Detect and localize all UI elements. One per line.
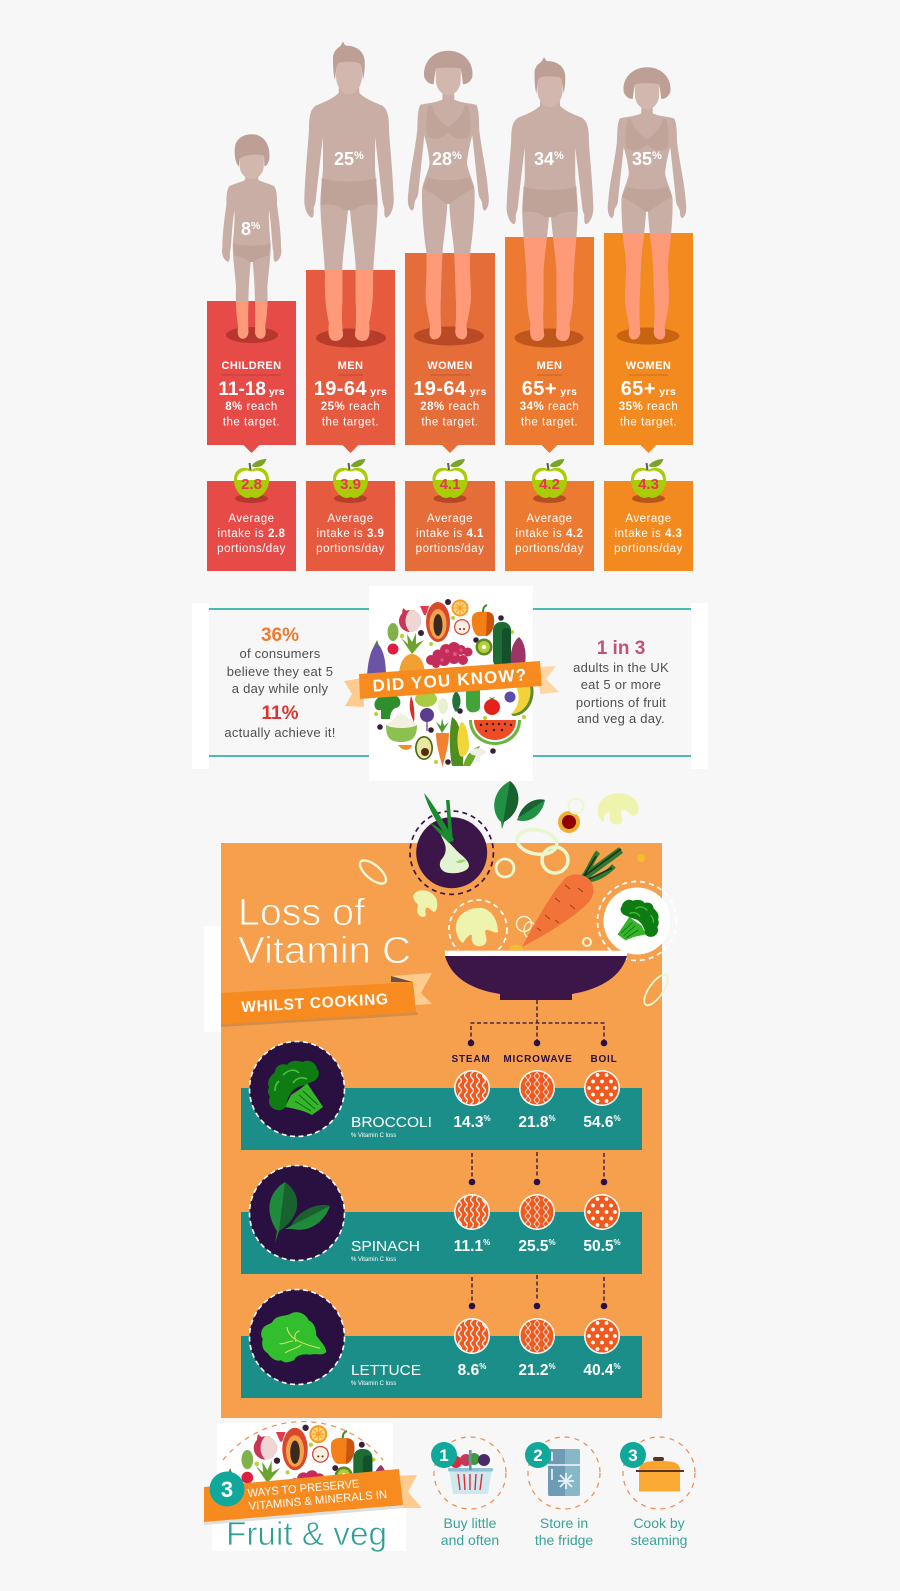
percent labels on figures: % [452,150,462,162]
panel: 3 ways to preserve [204,1421,696,1552]
tip 1: buy little and often: 1 [439,1446,449,1465]
panel: did you know [192,586,708,781]
illustration: onion rings [356,798,672,1009]
text: children block [218,360,285,428]
text: women 65+ block: the target. [620,416,677,428]
text: intake 4.2: Average [526,513,573,525]
intake block: men 19-64 [306,459,395,571]
block: men 65+ target [505,237,594,453]
text: store in the fridge: the fridge [535,1532,593,1548]
text: cook by steaming: steaming [631,1532,687,1548]
illustration: sauce drop [558,811,580,833]
panel: men 19-64 [304,42,395,453]
illustration: bowl [445,951,627,1000]
dot: yellow seeds [509,854,645,950]
values: broccoli: % [549,1114,556,1123]
row: lettuce [241,1290,642,1398]
text: buy little and often: Buy little [444,1515,497,1531]
text: cook by steaming: Cook by [633,1515,685,1531]
text: intake 3.9: portions/day [316,543,385,555]
badge: 2 [525,1442,551,1468]
dots: connector ends [468,1040,607,1046]
text: children block: the target. [223,416,280,428]
values: lettuce [458,1362,621,1379]
percent labels on figures: 28 [432,149,452,169]
tip 3: cook by steaming [620,1437,695,1548]
text: intake 4.1: portions/day [416,543,484,555]
text: intake 4.3: portions/day [614,543,683,555]
values: broccoli: % [614,1114,621,1123]
intake block: children [207,459,296,571]
ribbon: did you know: DID YOU KNOW? [372,665,528,696]
row: broccoli [241,1042,642,1150]
salmon legs: man [324,270,374,341]
salmon legs: child [236,301,268,339]
ribbon: whilst cooking [221,973,432,1027]
underlines beneath group names [222,374,668,376]
percent labels on figures: 35 [632,149,652,169]
shadow: women 65+ [616,328,680,344]
labels: cooking methods [452,1054,618,1065]
stat: 36 percent of consumers: actually achieve it! [224,725,336,740]
text: women 19-64 block [413,360,487,428]
illustration: broccoli circle [598,882,676,960]
shadow: children [226,327,278,343]
text: intake 4.2: portions/day [515,543,584,555]
row: broccoli: % Vitamin C loss [351,1133,396,1139]
text: men 19-64 block: the target. [322,416,379,428]
text: men 19-64 block: MEN [338,360,363,372]
panel: women 19-64 [405,51,495,453]
row: spinach: % Vitamin C loss [351,1257,396,1263]
row: lettuce: % Vitamin C loss [351,1381,396,1387]
text: women 65+ block: 35% reach [619,401,678,413]
intake block: women 65+ [604,459,693,571]
dashed arc [223,1422,383,1460]
block: men 19-64 target [306,270,395,453]
connectors: bowl to methods [471,1000,604,1043]
stat: 1 in 3 adults: eat 5 or more [581,677,661,692]
values: lettuce: 8.6 [458,1362,479,1379]
salmon legs: older woman [622,233,672,340]
icon: broccoli [250,1042,344,1136]
panel: women 65+ [604,67,693,453]
value: 4.3: 4.3 [638,476,659,493]
connectors: row 2 to row 3 [472,1275,604,1301]
block: children target [207,301,296,453]
values: broccoli: 54.6 [583,1114,614,1131]
text: ways to preserve: VITAMINS & MINERALS IN [248,1489,388,1513]
values: broccoli [453,1114,621,1131]
text: intake 3.9: Average [327,513,374,525]
percent labels on figures: % [554,150,564,162]
text: men 65+ block: 34% reach [520,401,579,413]
icon: apple 4.1 [432,459,468,503]
stat: 1 in 3 adults: portions of fruit [576,695,666,710]
percent labels on figures [241,149,662,239]
value: 2.8: 2.8 [241,476,262,493]
value: 3.9: 3.9 [340,476,361,493]
percent labels on figures: % [251,220,261,232]
text: women 65+ block: 65+ yrs [621,378,676,400]
text: buy little and often: and often [441,1532,499,1548]
values: spinach: % [549,1238,556,1247]
stat: 1 in 3 adults: adults in the UK [573,660,669,675]
heading: fruit and veg: Fruit & veg [226,1515,387,1552]
badge: 3 [210,1472,244,1506]
row: spinach [241,1166,642,1274]
tip 1: buy little and often [431,1437,506,1548]
value: 4.2: 4.2 [539,476,560,493]
ribbon: did you know [344,661,559,707]
dots: row 2 [469,1179,607,1185]
dots: row 3 [469,1303,607,1309]
ribbon: ways to preserve [204,1469,422,1525]
stat: 36 percent of consumers: believe they eat 5 [227,664,333,679]
percent labels on figures: 34 [534,149,554,169]
tip 2: store in the fridge: 2 [533,1446,543,1465]
percent labels on figures: % [354,150,364,162]
text: intake 4.1: intake is 4.1 [416,528,484,540]
icon: apple 2.8 [234,459,269,503]
text: women 65+ block: WOMEN [626,360,671,372]
text: ways to preserve: WAYS TO PRESERVE [247,1478,360,1500]
salmon legs: older man [524,237,576,341]
figure: woman [408,51,489,339]
text: ways to preserve [247,1478,388,1513]
intake block: men 65+ [505,459,594,571]
text: intake 2.8: Average [228,513,275,525]
methods: broccoli [454,1068,490,1108]
values: lettuce: 40.4 [583,1362,614,1379]
values: spinach [454,1238,621,1255]
text: children block: 11-18 yrs [218,379,285,400]
stat: 36 percent of consumers: 11% [262,703,299,724]
percent labels on figures: 25 [334,149,354,169]
icon: apple 4.2 [532,459,567,503]
figure: older woman [608,67,686,339]
block: women 19-64 target [405,253,495,453]
figure: older man [507,57,593,341]
values: spinach: 25.5 [518,1238,549,1255]
icon: pot [636,1457,684,1492]
values: broccoli: 14.3 [453,1114,484,1131]
illustration: small mushroom [413,890,437,917]
connectors: row 1 to row 2 [472,1152,604,1178]
icon: apple 4.3 [631,459,666,503]
figure: child [222,134,281,339]
panel: men 65+ [505,57,594,453]
methods: spinach [454,1192,490,1232]
stat: 36 percent of consumers: of consumers [239,646,321,661]
salmon legs: woman [426,253,471,340]
text: men 65+ block: 65+ yrs [522,378,577,400]
text: children block: 8% reach [225,401,278,413]
label: lettuce: LETTUCE [351,1362,421,1379]
shadow: men 19-64 [316,328,386,348]
text: men 19-64 block [314,360,387,428]
text: women 65+ block [619,360,678,428]
stat: 1 in 3 adults [573,638,669,726]
values: broccoli: % [484,1114,491,1123]
illustration: spinach leaves [494,781,545,829]
text: men 65+ block: the target. [521,416,578,428]
values: broccoli: 21.8 [518,1114,549,1131]
value: 4.1: 4.1 [440,476,460,493]
stat: 36 percent of consumers: 36% [261,625,299,646]
values: lettuce: 21.2 [518,1362,549,1379]
panel: children [207,134,296,453]
text: intake 4.3: Average [625,513,672,525]
intake block: women 19-64 [405,459,495,571]
text: children block: CHILDREN [221,360,282,372]
text: women 19-64 block: the target. [421,416,479,428]
panel: loss of vitamin C [204,781,676,1418]
text: women 19-64 block: WOMEN [427,360,473,372]
illustration: onion circle [410,793,493,894]
values: spinach: % [614,1238,621,1247]
tip 2: store in the fridge [525,1437,600,1548]
icon: spinach [250,1166,344,1260]
text: intake 3.9: intake is 3.9 [317,528,384,540]
values: lettuce: % [479,1362,486,1371]
illustration: pale mushroom top [598,793,639,825]
icon: apple 3.9 [333,459,368,503]
illustration: mushroom circle [449,900,507,958]
text: intake 4.1: Average [427,513,473,525]
text: women 19-64 block: 19-64 yrs [413,378,487,400]
ribbon: ways to preserve: 3 [221,1477,233,1502]
heading: loss of vitamin C: Vitamin C [238,930,411,972]
percent labels on figures: % [652,150,662,162]
text: men 65+ block [520,360,579,428]
block: women 65+ target [604,233,693,453]
labels: cooking methods: BOIL [590,1054,618,1065]
figure: man [304,42,394,341]
stat: 1 in 3 adults: 1 in 3 [597,638,645,659]
badge: 3 [620,1442,646,1468]
heading: loss of vitamin C [238,892,411,972]
badge: 1 [431,1442,457,1468]
text: intake 2.8: intake is 2.8 [218,528,285,540]
text: men 19-64 block: 25% reach [321,401,380,413]
values: spinach: % [483,1238,490,1247]
values: spinach: 11.1 [454,1238,483,1255]
heading: loss of vitamin C: Loss of [238,892,365,934]
text: store in the fridge: Store in [540,1515,588,1531]
ribbon: whilst cooking: WHILST COOKING [241,991,389,1016]
illustration: fruit and veg circle [367,599,534,767]
values: lettuce: % [614,1362,621,1371]
icon: basket [448,1450,493,1494]
stat: 36 percent of consumers: a day while only [232,681,328,696]
percent labels on figures: 8 [241,219,251,239]
stat: 1 in 3 adults: and veg a day. [577,711,665,726]
icon: lettuce [250,1290,344,1384]
label: spinach: SPINACH [351,1238,420,1255]
text: intake 2.8: portions/day [217,543,286,555]
illustration: carrot [522,849,621,947]
text: men 65+ block: MEN [537,360,562,372]
text: intake 4.3: intake is 4.3 [615,528,682,540]
label: broccoli: BROCCOLI [351,1114,432,1131]
values: lettuce: % [549,1362,556,1371]
icon: fridge [548,1449,580,1496]
methods: lettuce [454,1316,490,1356]
shadow: men 65+ [514,328,584,348]
text: intake 4.2: intake is 4.2 [516,528,583,540]
shadow: women 19-64 [414,326,484,346]
labels: cooking methods: MICROWAVE [503,1054,573,1065]
illustration: fruit crop [228,1424,385,1484]
text: men 19-64 block: 19-64 yrs [314,378,387,400]
values: spinach: 50.5 [583,1238,614,1255]
text: women 19-64 block: 28% reach [420,401,480,413]
tip 3: cook by steaming: 3 [628,1446,638,1465]
labels: cooking methods: STEAM [452,1054,490,1065]
stat: 36 percent of consumers [224,625,336,740]
